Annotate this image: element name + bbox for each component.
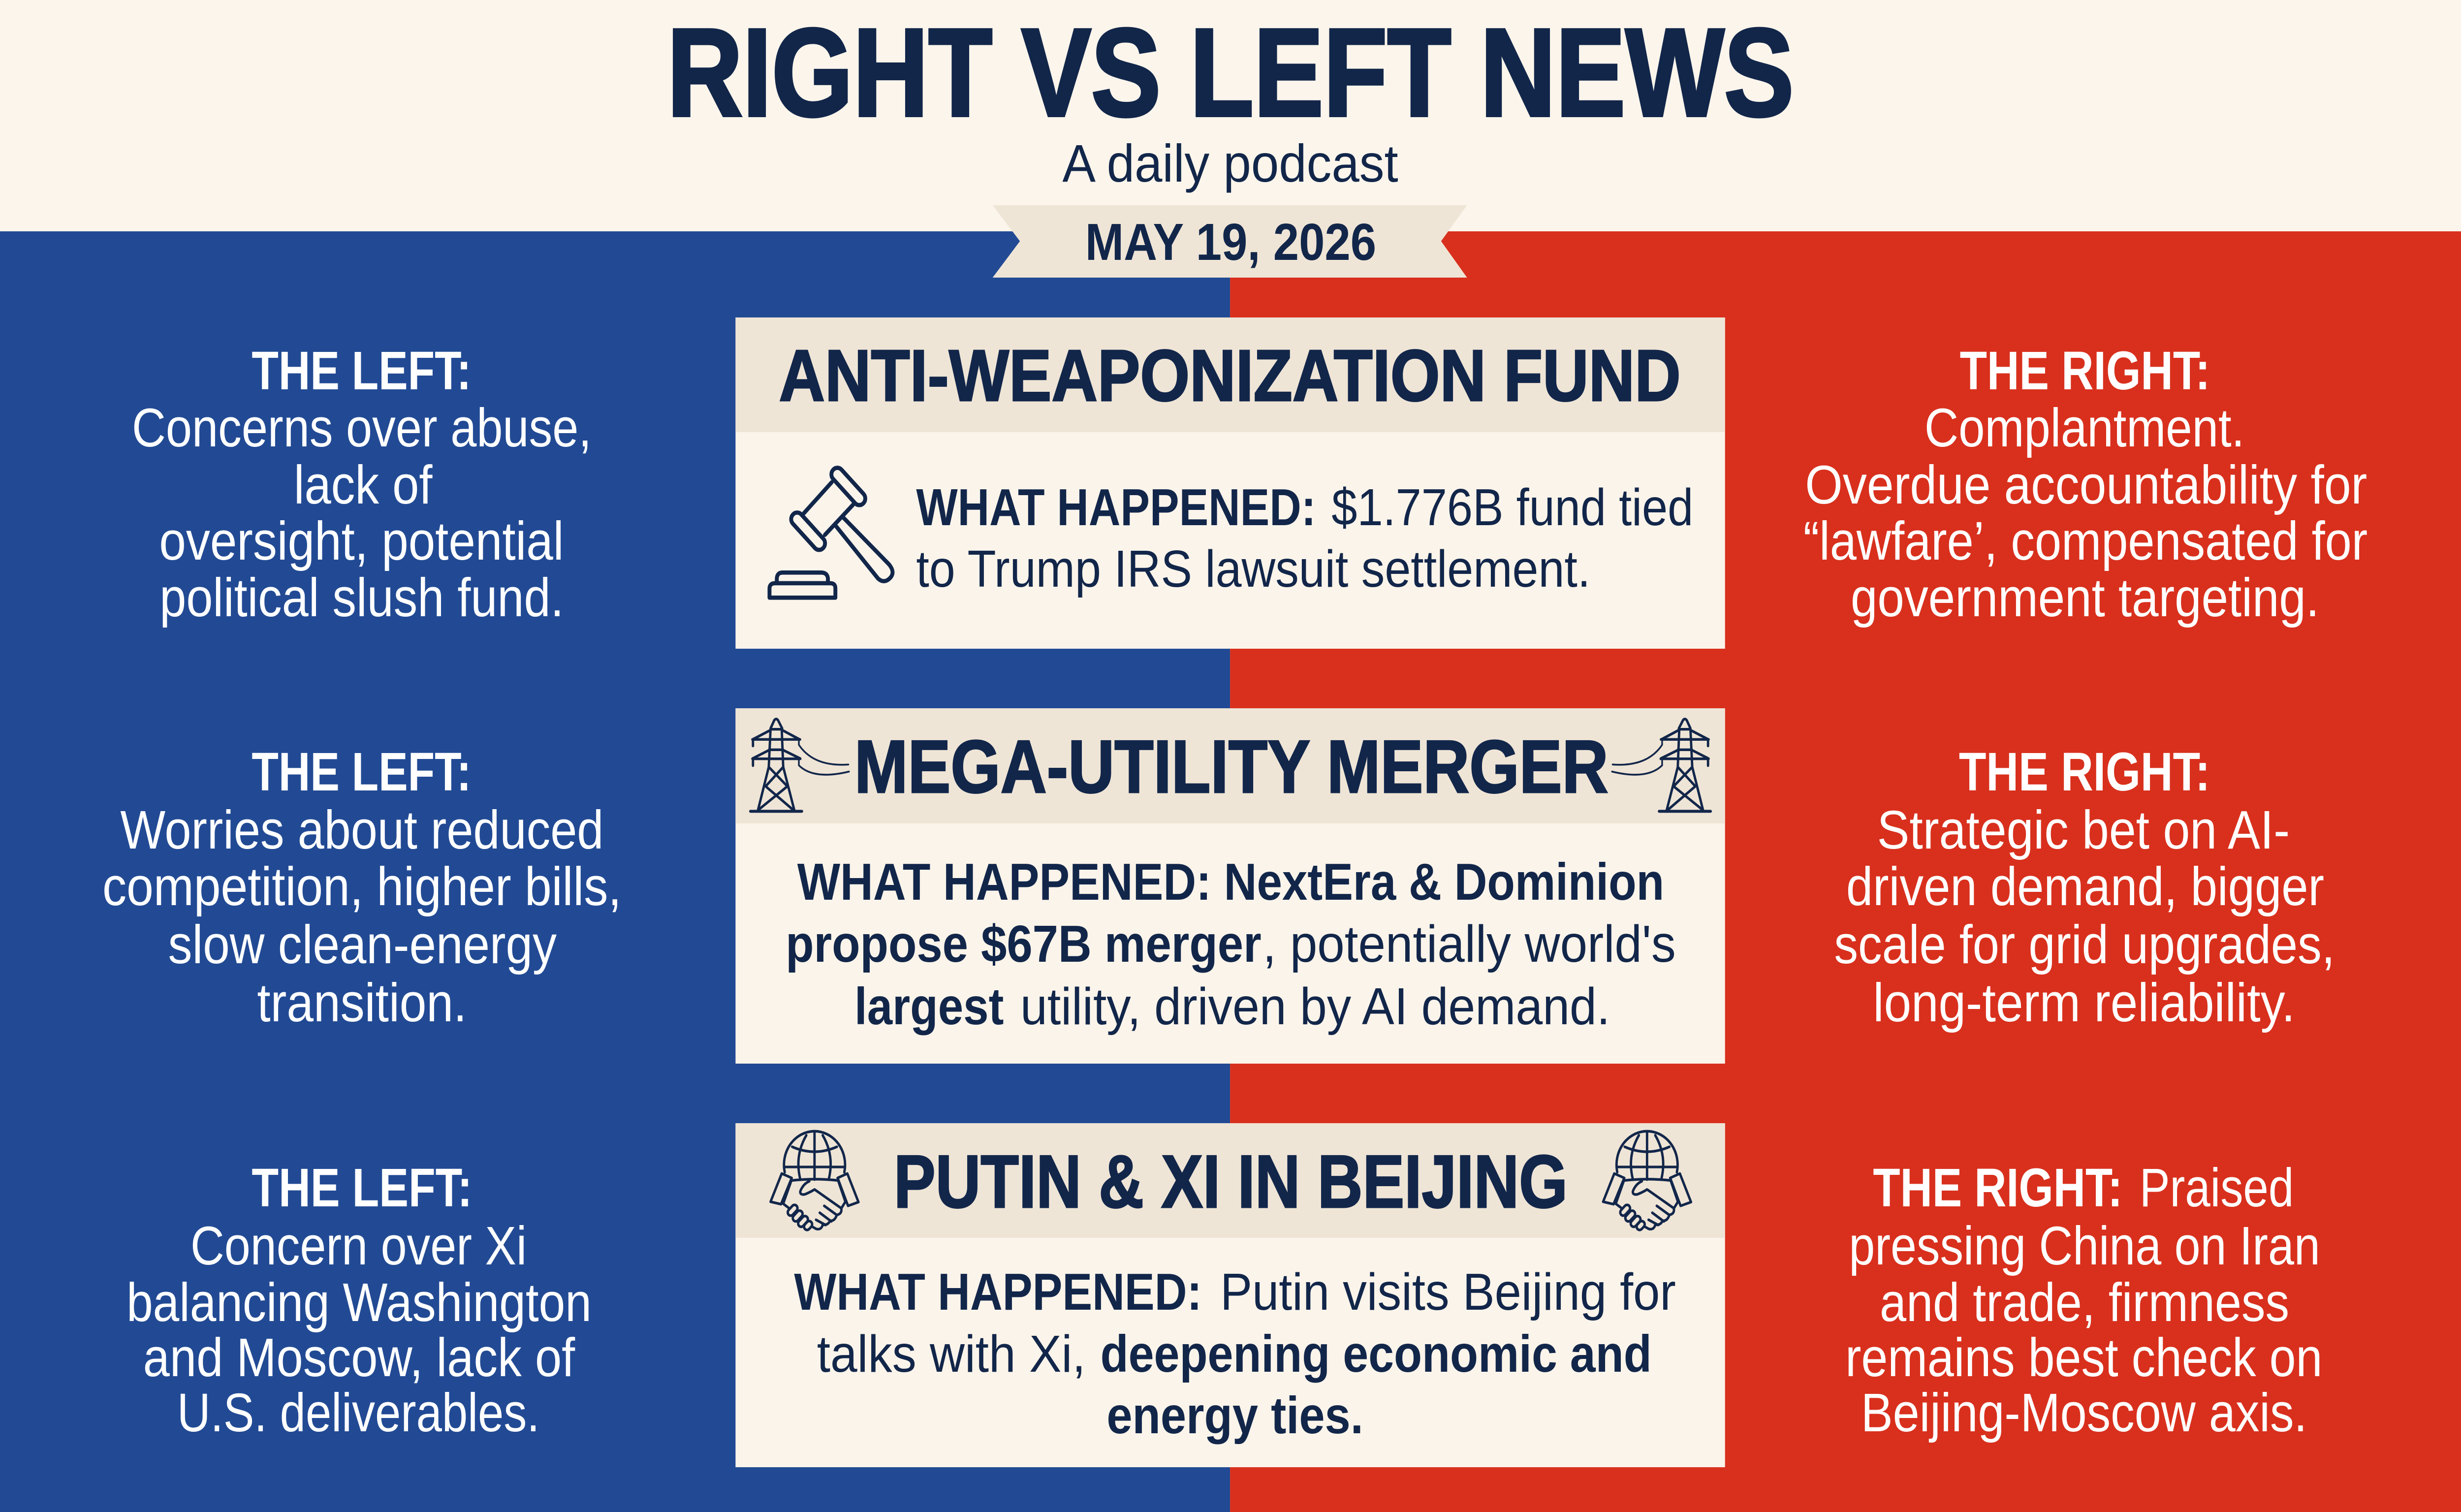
icon: right globe handshake [1603, 1131, 1691, 1231]
panel: left view on Beijing [126, 1158, 592, 1443]
panel: mega-utility merger card [735, 708, 1725, 1064]
panel: right view on merger [1834, 742, 2335, 1033]
date ribbon: MAY 19, 2026 [1085, 213, 1376, 271]
date ribbon [993, 205, 1467, 278]
panel: left view on Beijing: U.S. deliverables. [177, 1383, 539, 1443]
text: what happened Beijing: talks with Xi, [817, 1325, 1086, 1383]
text: what happened fund [916, 478, 1693, 598]
panel: right view on fund: “lawfare’, compensated for [1803, 511, 2367, 571]
panel: left view on merger [102, 742, 622, 1033]
panel: right view on Beijing: remains best check on [1845, 1328, 2322, 1388]
text: what happened Beijing: deepening economic and [1101, 1325, 1652, 1383]
subtitle: A daily podcast [1062, 134, 1398, 193]
heading: Beijing: PUTIN & XI IN BEIJING [894, 1140, 1568, 1223]
text: what happened Beijing: WHAT HAPPENED: [794, 1263, 1202, 1321]
panel: right view on fund [1803, 341, 2367, 628]
text: what happened fund: WHAT HAPPENED: [916, 478, 1316, 536]
panel: left view on merger: THE LEFT: [252, 742, 471, 802]
panel: right view on Beijing: Beijing-Moscow axis. [1861, 1383, 2307, 1443]
heading: merger: MEGA-UTILITY MERGER [854, 725, 1609, 808]
panel: right view on merger: scale for grid upgrades, [1834, 915, 2335, 975]
text: what happened Beijing: Putin visits Beijing for [1220, 1263, 1676, 1321]
text: what happened Beijing [794, 1263, 1676, 1445]
heading: fund: ANTI-WEAPONIZATION FUND [779, 335, 1681, 416]
panel: right view on merger: THE RIGHT: [1959, 742, 2210, 802]
panel: right view on fund: government targeting. [1851, 568, 2319, 628]
panel: left view on Beijing: Concern over Xi [190, 1216, 527, 1276]
panel: right view on merger: driven demand, bigger [1846, 857, 2324, 917]
text: what happened merger: propose $67B merger [786, 915, 1262, 973]
text: what happened merger: utility, driven by AI demand. [1020, 977, 1610, 1036]
panel: left view on fund: political slush fund. [159, 568, 564, 628]
text: what happened merger [786, 853, 1676, 1036]
panel: left view on Beijing: THE LEFT: [252, 1158, 472, 1218]
panel: right view on Beijing: THE RIGHT: [1873, 1158, 2122, 1218]
panel: right view on fund: Overdue accountability for [1805, 455, 2367, 515]
text: what happened merger: largest [854, 977, 1004, 1036]
text: what happened merger: , potentially world's [1262, 915, 1676, 973]
panel: right view on Beijing: and trade, firmness [1880, 1273, 2289, 1333]
panel: left view on merger: slow clean-energy [168, 915, 557, 975]
panel: left view on fund: oversight, potential [159, 511, 564, 571]
panel: left view on fund: lack of [294, 455, 433, 515]
panel: right view on merger: Strategic bet on AI- [1877, 800, 2290, 860]
panel: right view on merger: long-term reliability. [1873, 973, 2295, 1033]
icon: right transmission tower [1612, 719, 1710, 811]
panel: right view on Beijing [1845, 1158, 2322, 1443]
panel: right view on fund: THE RIGHT: [1960, 341, 2210, 401]
panel: left view on Beijing: and Moscow, lack of [143, 1328, 575, 1388]
text: what happened Beijing: energy ties. [1106, 1386, 1363, 1445]
panel: anti-weaponization fund card [735, 317, 1725, 649]
panel: left view on fund: THE LEFT: [252, 341, 471, 401]
panel: left view on fund [132, 341, 592, 628]
panel: left view on merger: transition. [257, 973, 467, 1033]
icon: left transmission tower [751, 719, 849, 811]
icon: gavel [769, 465, 892, 598]
panel: left view on merger: Worries about reduced [120, 800, 603, 860]
title: RIGHT VS LEFT NEWS [667, 3, 1794, 142]
text: what happened merger: WHAT HAPPENED: NextEra & Dominion [797, 853, 1664, 911]
panel: left view on Beijing: balancing Washington [126, 1273, 592, 1333]
icon: left globe handshake [771, 1131, 858, 1231]
header background [0, 0, 2461, 231]
panel: right view on Beijing: Praised [2140, 1158, 2294, 1218]
panel: right view on fund: Complantment. [1925, 398, 2244, 458]
text: what happened fund: $1.776B fund tied [1331, 478, 1693, 536]
panel: left view on merger: competition, higher bills, [102, 857, 622, 917]
red right half [1230, 231, 2461, 1512]
panel: right view on Beijing: pressing China on Iran [1849, 1216, 2320, 1276]
panel: left view on fund: Concerns over abuse, [132, 398, 592, 458]
panel: Putin and Xi card [735, 1123, 1725, 1467]
blue left half [0, 231, 1230, 1512]
text: what happened fund: to Trump IRS lawsuit settlement. [916, 540, 1590, 598]
